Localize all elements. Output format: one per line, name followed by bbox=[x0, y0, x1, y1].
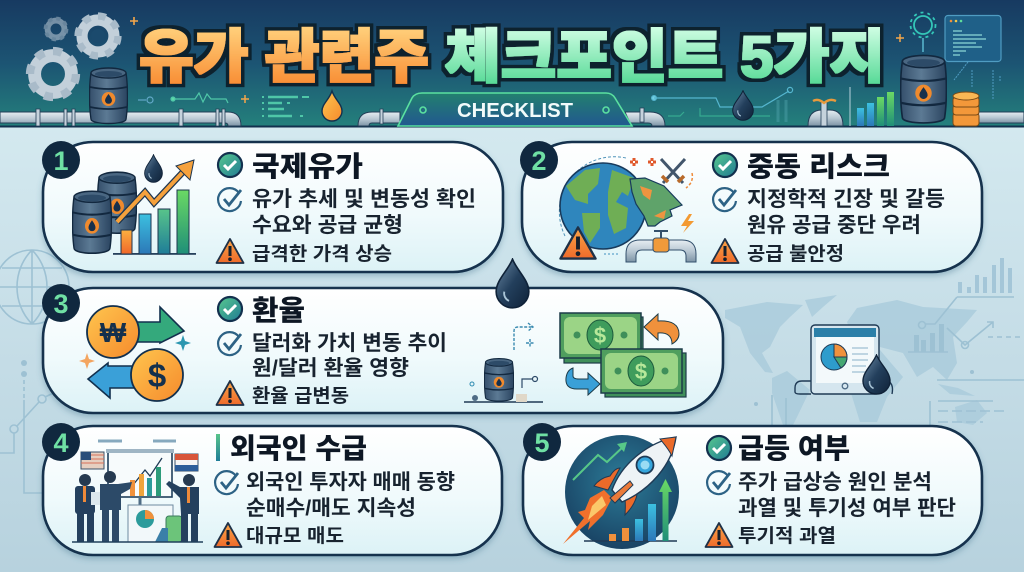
badge 1 bbox=[42, 141, 80, 179]
panel 2: middle east risk bbox=[520, 141, 982, 272]
icon: check bbox=[218, 153, 242, 177]
icon: check bbox=[707, 436, 731, 460]
header banner bbox=[0, 0, 1024, 128]
icon: code screen bbox=[896, 16, 1001, 100]
warning: 환율 급변동 bbox=[252, 385, 349, 407]
warning bbox=[712, 239, 844, 265]
checklist text: 수요와 공급 균형 bbox=[252, 214, 403, 237]
heading: 환율 bbox=[252, 295, 305, 326]
icon: gears bbox=[30, 16, 138, 97]
background decoration: world map, charts, globe bbox=[0, 250, 1024, 493]
heading: 외국인 수급 bbox=[230, 433, 367, 464]
badge 5: 5 bbox=[534, 428, 550, 458]
panel 3: exchange rate bbox=[42, 284, 723, 413]
badge 4: 4 bbox=[53, 428, 69, 458]
checklist text: 유가 추세 및 변동성 확인 bbox=[252, 188, 476, 211]
illustration: won and dollar coins: ₩ bbox=[100, 317, 127, 348]
checklist text: 지정학적 긴장 및 갈등 bbox=[747, 188, 945, 211]
warning bbox=[214, 523, 344, 547]
person left bbox=[75, 474, 102, 542]
badge 1: 1 bbox=[53, 146, 69, 176]
checklist text bbox=[218, 188, 476, 237]
badge 2: 2 bbox=[531, 146, 547, 176]
icon: check bbox=[218, 297, 242, 321]
icon: check bbox=[713, 153, 737, 177]
checklist text bbox=[707, 471, 956, 520]
checklist text: 원/달러 환율 영향 bbox=[252, 357, 409, 380]
icon: oil barrel left bbox=[89, 68, 128, 124]
checklist text: 순매수/매도 지속성 bbox=[246, 497, 416, 520]
heading: 국제유가 bbox=[252, 151, 363, 182]
checklist text bbox=[713, 188, 945, 237]
accent bar bbox=[216, 434, 220, 461]
icon: dark drop bbox=[733, 91, 753, 120]
illustration: globe, conflict and pipe bbox=[559, 157, 696, 262]
warning: 투기적 과열 bbox=[738, 525, 836, 547]
illustration: small barrel bbox=[464, 323, 543, 402]
warning: 공급 불안정 bbox=[747, 243, 844, 265]
badge 2 bbox=[520, 141, 558, 179]
checklist text: 원유 공급 중단 우려 bbox=[747, 214, 921, 237]
illustration: won and dollar coins: $ bbox=[148, 357, 166, 394]
warning bbox=[706, 523, 836, 547]
checklist tab: CHECKLIST bbox=[457, 100, 573, 122]
person middle bbox=[100, 471, 132, 542]
tablet with pie chart bbox=[795, 325, 892, 394]
checklist text bbox=[215, 471, 455, 520]
heading: 중동 리스크 bbox=[747, 151, 890, 182]
illustration: barrels and rising chart bbox=[72, 155, 196, 255]
checklist text: 주가 급상승 원인 분석 bbox=[738, 471, 932, 494]
icon: light bulb bbox=[910, 12, 936, 52]
header bar chart bbox=[850, 87, 894, 126]
pipes bbox=[0, 100, 1024, 126]
person right bbox=[166, 474, 199, 542]
circuit decoration right bbox=[652, 87, 793, 122]
checklist tab bbox=[398, 93, 632, 126]
illustration: rocket and bars bbox=[563, 435, 679, 549]
badge 5 bbox=[523, 423, 561, 461]
illustration: banknotes: $ bbox=[594, 323, 606, 348]
warning bbox=[216, 381, 349, 407]
badge 4 bbox=[42, 423, 80, 461]
checklist text: 외국인 투자자 매매 동향 bbox=[246, 471, 455, 494]
checklist text bbox=[218, 332, 447, 380]
illustration: banknotes: $ bbox=[635, 359, 647, 384]
warning: 급격한 가격 상승 bbox=[252, 243, 392, 265]
illustration: investors at chart board bbox=[72, 441, 203, 542]
checklist text: 과열 및 투기성 여부 판단 bbox=[738, 497, 956, 520]
title: 유가 관련주 bbox=[139, 25, 429, 90]
panel 4: foreign investor flow bbox=[42, 423, 502, 555]
icon: orange drop bbox=[322, 91, 342, 121]
heading: 급등 여부 bbox=[738, 433, 850, 464]
oil drop between panels bbox=[492, 255, 534, 312]
checklist text: 달러화 가치 변동 추이 bbox=[252, 332, 447, 355]
panel 1: international oil price bbox=[42, 141, 503, 272]
warning bbox=[216, 239, 392, 265]
illustration: banknotes bbox=[560, 313, 686, 397]
circuit and list decoration left bbox=[138, 93, 309, 116]
badge 3 bbox=[42, 284, 80, 322]
panel 5: surge check bbox=[523, 423, 982, 555]
icon: coin stack bbox=[953, 92, 979, 126]
badge 3: 3 bbox=[53, 289, 69, 319]
warning: 대규모 매도 bbox=[246, 525, 344, 547]
illustration: won and dollar coins bbox=[79, 306, 191, 401]
icon: oil barrel right bbox=[901, 55, 946, 123]
title: 체크포인트 5가지 bbox=[445, 25, 885, 90]
